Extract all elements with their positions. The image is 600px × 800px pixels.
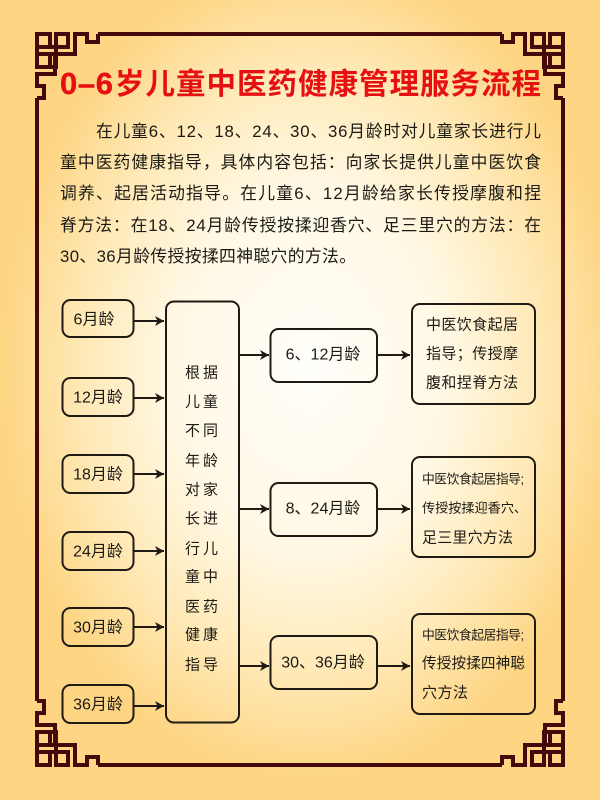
age box: 36 months: [62, 685, 134, 723]
frame corner: bottom left: [37, 701, 98, 765]
age group box: 6, 12 months: 6、12月龄: [286, 346, 360, 364]
title: 岁儿童中医药健康管理服务流程: [115, 68, 541, 101]
intro paragraph: 脊方法：在18、24月龄传授按揉迎香穴、足三里穴的方法：在: [60, 216, 541, 235]
age group box: 8, 24 months: [270, 483, 377, 536]
central guidance box: 长进: [185, 510, 221, 528]
central guidance box: 儿童: [185, 392, 221, 410]
frame corner: top right: [502, 34, 563, 98]
intro paragraph: 调养、起居活动指导。在儿童6、12月龄给家长传授摩腹和捏: [60, 184, 541, 203]
frame corner: top left: [37, 34, 98, 98]
content box: Sishencong point: [412, 614, 535, 714]
age group box: 6, 12 months: [270, 329, 377, 382]
age box: 18 months: [62, 455, 134, 493]
age box: 30 months: 30月龄: [73, 618, 123, 636]
intro paragraph: 30、36月龄传授按揉四神聪穴的方法。: [60, 247, 356, 266]
age box: 18 months: 18月龄: [73, 466, 123, 484]
arrows: ages to guidance box: [134, 321, 164, 706]
intro paragraph: [60, 122, 541, 266]
content box: diet and abdominal massage: 指导；传授摩: [426, 344, 518, 362]
age box: 12 months: [62, 378, 134, 416]
central guidance box: [166, 302, 239, 722]
age box: 6 months: [62, 300, 134, 337]
content box: Sishencong point: 穴方法: [422, 684, 468, 702]
title: 0–6: [60, 66, 113, 101]
age box: 30 months: [62, 608, 134, 646]
arrows: age groups to content: [377, 355, 410, 666]
arrows: guidance box to age groups: [239, 355, 269, 666]
frame corner: bottom right: [502, 701, 563, 765]
content box: Yingxiang and Zusanli points: 传授按揉迎香穴、: [422, 500, 527, 516]
central guidance box: 行儿: [185, 540, 221, 558]
content box: diet and abdominal massage: 腹和捏脊方法: [426, 374, 518, 392]
content box: diet and abdominal massage: [412, 304, 535, 404]
age group box: 30, 36 months: [270, 636, 377, 689]
content box: Sishencong point: 传授按揉四神聪: [422, 655, 525, 672]
content box: Yingxiang and Zusanli points: [412, 457, 535, 557]
central guidance box: 指导: [185, 656, 221, 674]
central guidance box: 根据: [185, 364, 221, 382]
age box: 12 months: 12月龄: [73, 388, 123, 406]
central guidance box: 不同: [185, 422, 221, 440]
central guidance box: 健康: [185, 626, 221, 644]
content box: Yingxiang and Zusanli points: 足三里穴方法: [422, 530, 513, 546]
age box: 36 months: 36月龄: [73, 696, 123, 714]
central guidance box: 童中: [185, 568, 221, 586]
content box: Yingxiang and Zusanli points: 中医饮食起居指导;: [422, 472, 524, 486]
age group box: 30, 36 months: 30、36月龄: [281, 654, 365, 672]
intro paragraph: 童中医药健康指导，具体内容包括：向家长提供儿童中医饮食: [60, 153, 541, 172]
central guidance box: 医药: [185, 598, 221, 616]
content box: Sishencong point: 中医饮食起居指导;: [422, 628, 524, 642]
age box: 24 months: 24月龄: [73, 542, 123, 560]
age box: 24 months: [62, 532, 134, 570]
age box: 6 months: 6月龄: [74, 310, 114, 328]
central guidance box: 对家: [185, 482, 221, 498]
intro paragraph: 在儿童6、12、18、24、30、36月龄时对儿童家长进行儿: [96, 122, 541, 141]
content box: diet and abdominal massage: 中医饮食起居: [426, 316, 518, 334]
central guidance box: 年龄: [185, 452, 221, 470]
age group box: 8, 24 months: 8、24月龄: [286, 500, 360, 518]
